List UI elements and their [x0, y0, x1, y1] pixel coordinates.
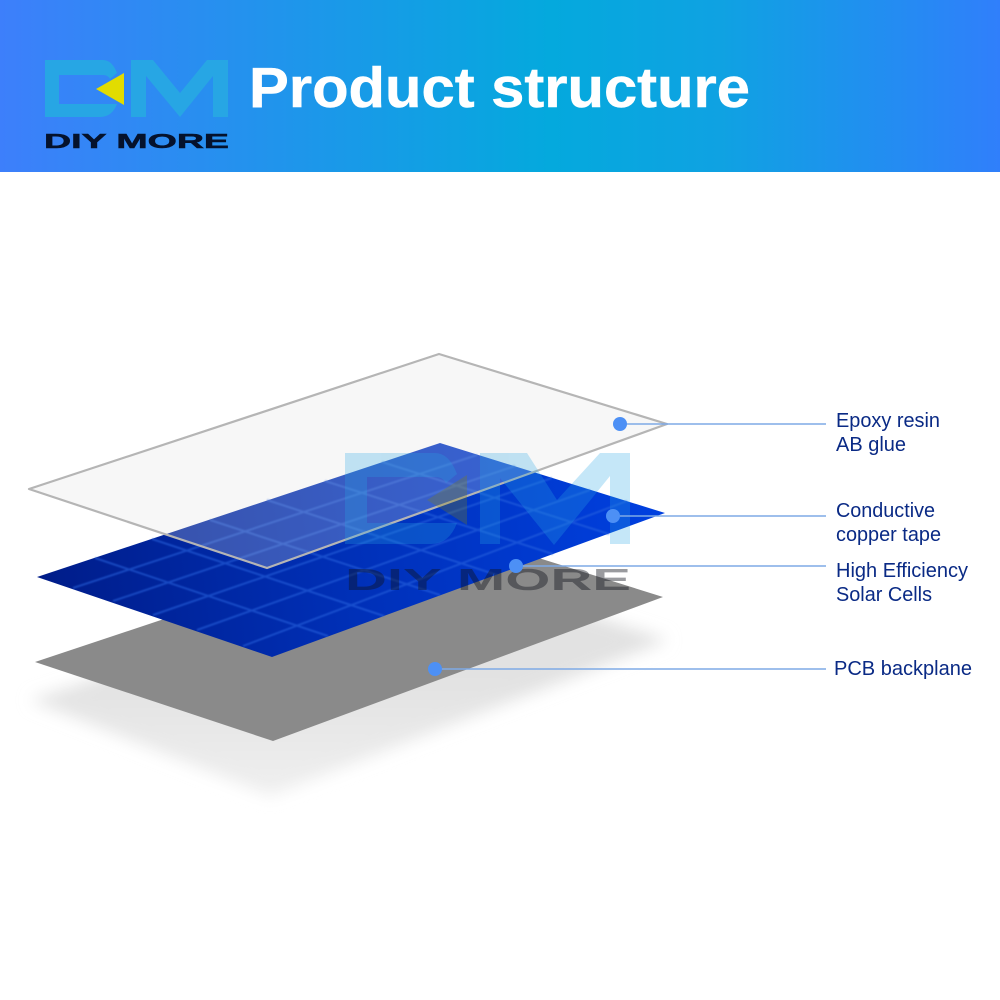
layer: epoxy resin glass [29, 354, 667, 568]
cell grid [73, 455, 627, 646]
callout: high efficiency solar cells: High Efficiency [836, 560, 968, 582]
callout: high efficiency solar cells [509, 559, 968, 606]
layer: PCB backplane [35, 527, 663, 741]
watermark logo [345, 453, 630, 545]
logo: DIY MORE: DIY MORE [44, 131, 229, 153]
layer: solar cells [37, 443, 665, 657]
callout: epoxy resin [613, 410, 940, 456]
callout: epoxy resin: AB glue [836, 434, 906, 456]
header banner [0, 0, 1000, 172]
watermark text: DIY MORE [345, 562, 631, 597]
callout: conductive copper tape [606, 500, 941, 546]
logo: DIY MORE [44, 60, 229, 153]
shadow under panel [30, 565, 668, 796]
callout: conductive copper tape: copper tape [836, 524, 941, 546]
callout: high efficiency solar cells: Solar Cells [836, 584, 932, 606]
callout: conductive copper tape: Conductive [836, 500, 935, 522]
callout: PCB backplane [428, 658, 972, 680]
callout: PCB backplane: PCB backplane [834, 658, 972, 680]
callout: epoxy resin: Epoxy resin [836, 410, 940, 432]
title: Product structure [249, 56, 750, 120]
